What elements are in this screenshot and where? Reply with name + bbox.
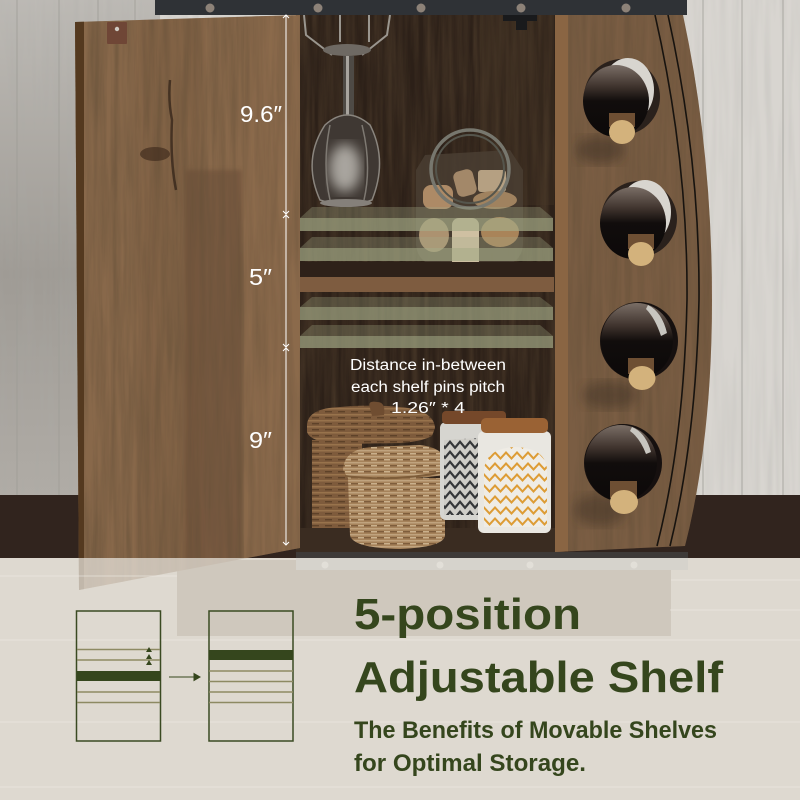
bottle 2 [600,180,677,266]
cabinet top bar [155,0,687,15]
wine rack side panel [554,15,715,555]
shelf pin note [350,357,506,417]
shelf pin note: Distance in-between [350,357,506,374]
green shelf position bands [300,207,553,348]
bottle 4 [584,424,662,514]
shelf [298,262,554,292]
title: 5-position [354,590,581,639]
dimension labels: 9″ [249,427,272,453]
hanging wine glass [304,15,390,207]
dimension labels: 9.6″ [240,101,282,127]
title: Adjustable Shelf [354,653,723,702]
title [354,590,723,702]
dimension labels: 5″ [249,264,272,290]
cabinet stand [177,560,671,636]
shelf diagram: before [76,611,161,741]
subtitle: for Optimal Storage. [354,750,586,777]
cabinet door [70,10,305,595]
canisters [440,411,551,533]
cabinet hinge [503,15,537,30]
dimension labels [240,101,282,453]
cabinet interior [296,15,556,555]
floor plank lines [0,576,800,787]
cabinet [70,0,715,636]
subtitle: The Benefits of Movable Shelves [354,717,717,744]
dimension line [283,15,289,545]
subtitle [354,717,717,777]
shelf pin note: each shelf pins pitch [351,379,505,396]
arrow [169,674,200,680]
bottle 1 [583,58,660,144]
bottle 3 [600,302,678,390]
baseboard and floor [0,495,800,800]
wall background [0,0,800,497]
jar of corks [416,130,523,268]
shelf pin note: 1.26″ * 4 [391,400,465,417]
baskets [307,402,446,549]
shelf diagram: after [209,611,293,741]
cabinet base rail [296,552,688,570]
floor overlay panel [0,558,800,800]
